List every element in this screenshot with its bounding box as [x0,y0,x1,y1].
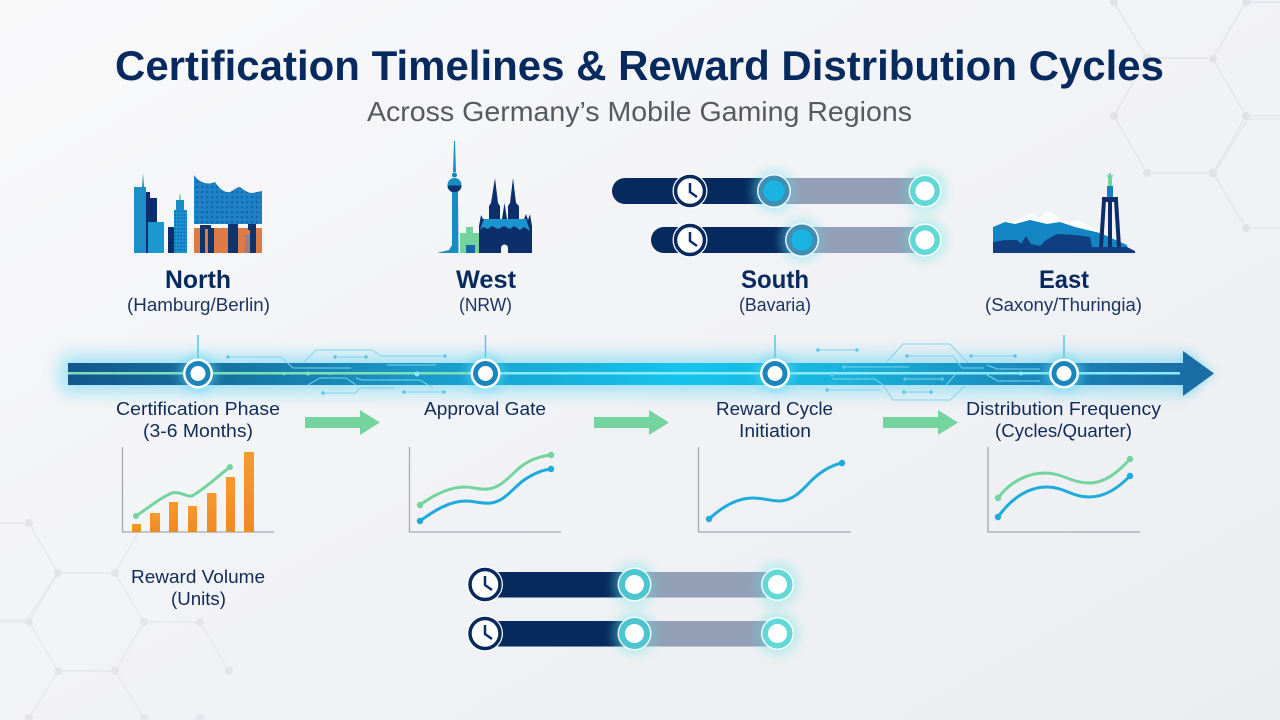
clock progress bars: bottom [467,562,800,656]
icon: east mountains and monument [993,173,1135,253]
region: east [985,266,1142,315]
icon: north skyline [134,173,262,253]
circuit traces left [226,350,447,395]
region: east: East [1039,266,1090,294]
arrow: certification to approval [305,410,380,435]
stems [198,335,1064,360]
main timeline arrow [60,335,1214,400]
timeline nodes [179,354,1083,392]
decorative hexagon network: bottom left [0,519,233,720]
icon: west tower and cathedral [437,141,532,253]
progress bar 4 [467,612,800,656]
decorative hexagon network: top right [1110,0,1280,232]
region: west [456,266,517,315]
label: reward cycle initiation [716,398,833,441]
label: approval gate: Approval Gate [424,398,546,419]
chart: reward volume bars and line [122,447,274,532]
clock progress bars: south top [612,169,947,262]
region: south [739,266,811,315]
arrow: approval to reward cycle [594,410,669,435]
chart: reward cycle line [698,447,851,532]
label: distribution frequency: Distribution Frequency [966,398,1162,419]
subtitle: Across Germany’s Mobile Gaming Regions [367,96,912,127]
label: reward volume: (Units) [171,588,226,609]
region: south: South [741,266,809,294]
region: south: (Bavaria) [739,294,811,315]
chart: approval gate lines [410,447,561,532]
region: north: North [165,266,231,294]
label: certification phase: (3-6 Months) [143,420,253,441]
region: north: (Hamburg/Berlin) [127,294,270,315]
progress bar 1 [612,169,947,213]
label: distribution frequency: (Cycles/Quarter) [995,420,1132,441]
label: reward cycle initiation: Reward Cycle [716,398,833,419]
phase labels [116,398,1162,609]
label: distribution frequency [966,398,1162,441]
arrow: reward cycle to distribution [883,410,958,435]
chart: distribution frequency lines [988,447,1140,532]
circuit traces right [816,344,1040,400]
label: reward volume [131,566,265,609]
region: west: West [456,266,517,294]
label: certification phase [116,398,280,441]
label: certification phase: Certification Phase [116,398,280,419]
region: west: (NRW) [459,294,512,315]
label: reward cycle initiation: Initiation [739,420,811,441]
region: east: (Saxony/Thuringia) [985,294,1142,315]
progress bar 3 [467,562,800,606]
label: reward volume: Reward Volume [131,566,265,587]
region: north [127,266,270,315]
region labels [127,266,1142,315]
title: Certification Timelines & Reward Distribution Cycles [115,42,1164,89]
progress bar 2 [651,218,947,262]
